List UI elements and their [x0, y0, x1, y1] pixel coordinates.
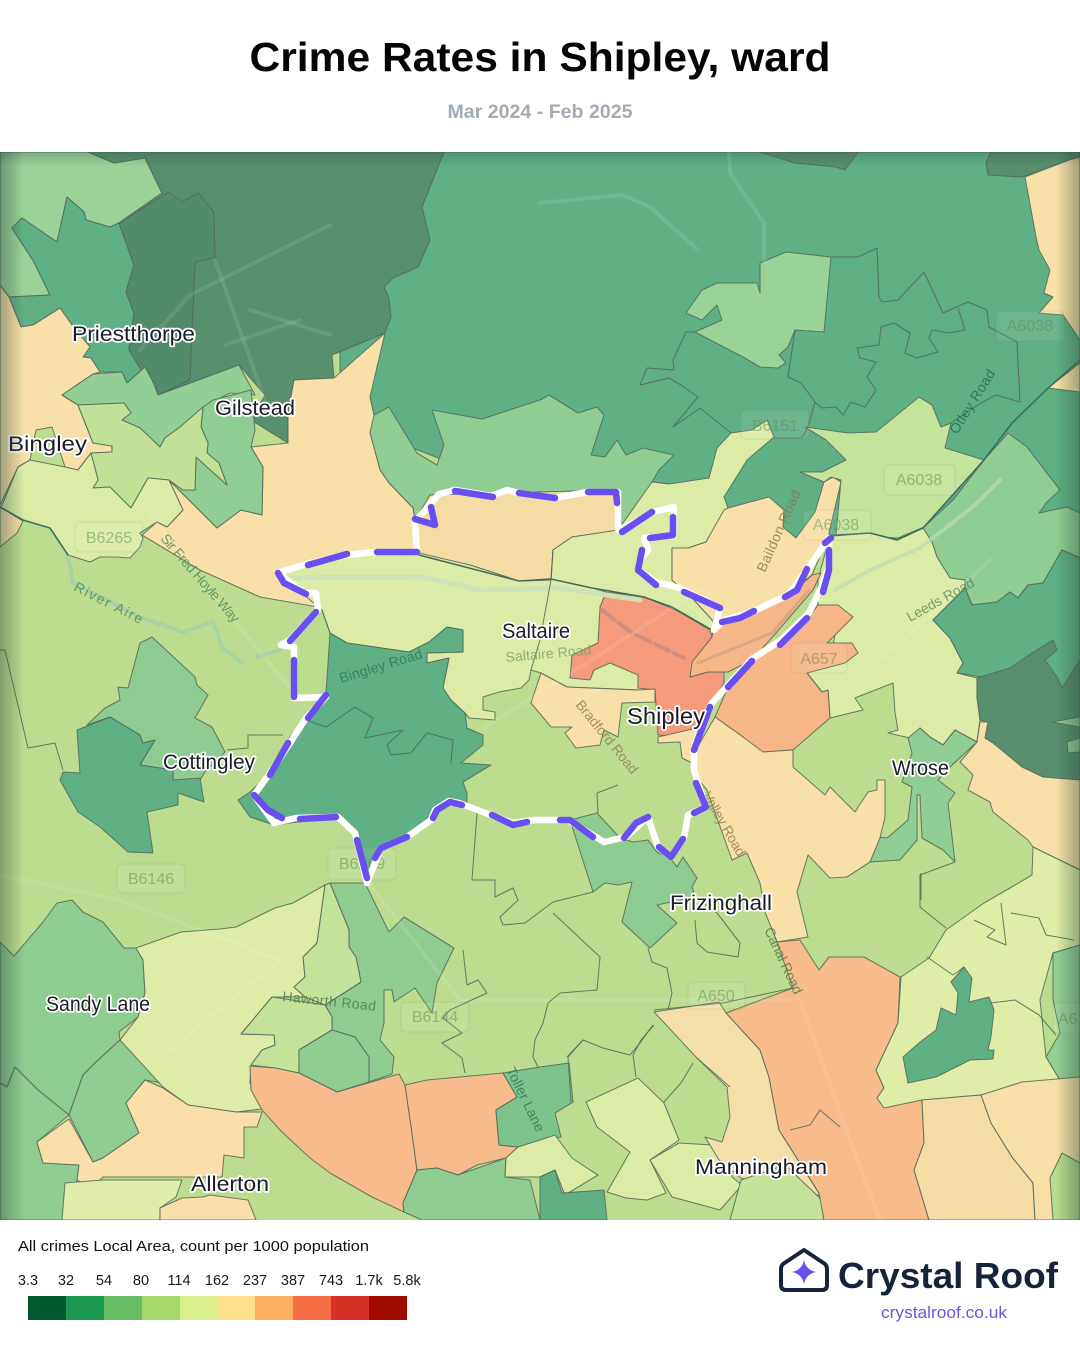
road and river names: Bradford Road: [573, 697, 642, 777]
title: Crime Rates in Shipley, ward: [250, 34, 830, 80]
road and river names: Saltaire Road: [505, 642, 592, 665]
place name labels: Gilstead: [215, 397, 295, 420]
place name labels: Sandy Lane: [46, 993, 150, 1016]
ward boundary: Shipley: [254, 490, 831, 883]
road number shields: A657: [800, 651, 838, 668]
icon: house with star: [781, 1250, 827, 1290]
legend scale labels: 162: [205, 1273, 229, 1289]
road and river names: River Aire: [72, 578, 146, 627]
road number shields: A650: [697, 988, 735, 1005]
logo wordmark: Crystal Roof: [838, 1255, 1059, 1296]
legend scale labels: 114: [167, 1273, 191, 1289]
place name labels: Manningham: [695, 1156, 827, 1179]
place name labels: Cottingley: [163, 751, 255, 774]
legend: [18, 1239, 421, 1320]
logo: Crystal Roof: [781, 1250, 1059, 1322]
road and river names: Baildon Road: [753, 487, 804, 574]
legend scale labels: 32: [58, 1273, 74, 1289]
place name labels: Bingley: [8, 433, 88, 456]
legend scale labels: 5.8k: [393, 1273, 421, 1289]
road number shields: B6144: [412, 1009, 458, 1026]
legend scale labels: [18, 1273, 421, 1289]
legend title: All crimes Local Area, count per 1000 population: [18, 1239, 369, 1255]
road and river names: Haworth Road: [282, 988, 377, 1014]
road and river names: Bingley Road: [337, 645, 424, 686]
road and river names: Otley Road: [946, 366, 998, 437]
road number shields: B6265: [86, 530, 132, 547]
place name labels: Shipley: [627, 703, 706, 729]
road number shields: [75, 311, 1080, 1033]
legend scale labels: 1.7k: [355, 1273, 383, 1289]
legend scale labels: 54: [96, 1273, 112, 1289]
road and river names: Sir Fred Hoyle Way: [158, 530, 243, 625]
place name labels: Saltaire: [502, 620, 570, 643]
place name labels: Wrose: [892, 757, 949, 780]
road number shields: B6146: [128, 871, 174, 888]
legend scale labels: 743: [319, 1273, 343, 1289]
place name labels: Frizinghall: [670, 892, 772, 915]
road number shields: B6151: [752, 418, 798, 435]
legend scale labels: 80: [133, 1273, 149, 1289]
road number shields: A6038: [813, 517, 859, 534]
place name labels: Priestthorpe: [72, 323, 195, 346]
place name labels: Allerton: [191, 1173, 269, 1196]
road number shields: B6269: [339, 856, 385, 873]
road number shields: A6038: [896, 472, 942, 489]
place name labels: [8, 323, 949, 1196]
road and river names: Canal Road: [761, 925, 806, 997]
legend colour bar: [28, 1296, 407, 1320]
road and river names: Toller Lane: [503, 1064, 548, 1134]
crime rate areas: [0, 152, 1080, 1220]
road and river names: Valley Road: [699, 788, 749, 859]
area boundary lines: [0, 248, 1074, 1130]
road and river names: [72, 366, 998, 1134]
legend scale labels: 237: [243, 1273, 267, 1289]
waterways: [0, 360, 1080, 663]
faint roads: [0, 153, 990, 1220]
road number shields: A6038: [1007, 318, 1053, 335]
legend scale labels: 3.3: [18, 1273, 38, 1289]
road and river names: Leeds Road: [904, 574, 977, 625]
legend scale labels: 387: [281, 1273, 305, 1289]
subtitle: date range: Mar 2024 - Feb 2025: [448, 102, 633, 123]
website url: crystalroof.co.uk: [881, 1304, 1008, 1322]
choropleth map panel: [0, 152, 1080, 1220]
